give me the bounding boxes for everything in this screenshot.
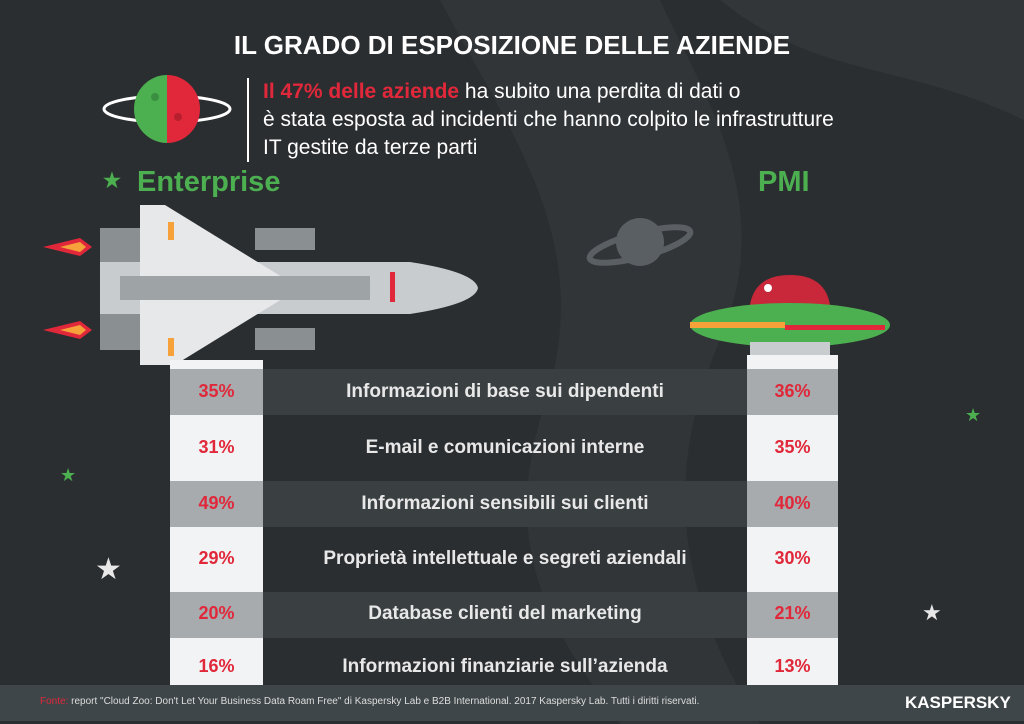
row bands	[170, 369, 838, 415]
row 5: 20%	[198, 603, 235, 623]
row 1: 35%	[198, 381, 235, 401]
heading: Enterprise: ★ Enterprise	[103, 166, 280, 198]
text block: 47%	[247, 78, 867, 162]
row 1: 36%	[774, 381, 811, 401]
stars: ★	[60, 465, 76, 485]
row 3: 49%	[198, 493, 235, 513]
text block: 47%: IT gestite da terze parti	[263, 136, 477, 159]
row 3: Informazioni sensibili sui clienti	[361, 493, 649, 514]
text block: 47%: Il 47% delle aziende ha subito una perdita di dati o	[263, 80, 740, 103]
footer	[0, 685, 1024, 721]
icon: UFO	[690, 275, 890, 355]
text block: 47%: è stata esposta ad incidenti che hanno colpito le infrastrutture	[263, 108, 834, 131]
row 4: 30%	[774, 548, 811, 568]
icon: planet grey	[586, 218, 694, 266]
row 6: 13%	[774, 656, 811, 676]
icon: space shuttle	[43, 205, 478, 365]
row 4	[198, 548, 811, 569]
heading: PMI: PMI	[758, 166, 810, 198]
row 3	[198, 493, 811, 514]
row 5: Database clienti del marketing	[368, 603, 642, 624]
title: IL GRADO DI ESPOSIZIONE DELLE AZIENDE	[234, 30, 790, 60]
row 4: 29%	[198, 548, 235, 568]
row 1	[198, 381, 811, 402]
text: ★	[922, 600, 942, 625]
row 1: Informazioni di base sui dipendenti	[346, 381, 664, 402]
icon: planet green red	[102, 75, 232, 143]
row 6	[198, 656, 811, 677]
row 3: 40%	[774, 493, 811, 513]
footer: KASPERSKY	[905, 693, 1011, 712]
row 6: Informazioni finanziarie sull’azienda	[342, 656, 668, 677]
row 2: 31%	[198, 437, 235, 457]
text: ★	[965, 405, 981, 425]
table columns	[170, 360, 263, 685]
row 2: 35%	[774, 437, 811, 457]
row 6: 16%	[198, 656, 235, 676]
row 5: 21%	[774, 603, 811, 623]
footer: Fonte: report "Cloud Zoo: Don't Let Your Business Data Roam Free" di Kaspersky Lab e B2B International. 2017 Kaspersky Lab. Tutti i diritti riservati.	[40, 696, 699, 707]
row 2	[198, 437, 811, 458]
row 5	[198, 603, 811, 624]
text: ★	[95, 553, 122, 586]
row 4: Proprietà intellettuale e segreti aziendali	[323, 548, 687, 569]
row 2: E-mail e comunicazioni interne	[366, 437, 644, 458]
